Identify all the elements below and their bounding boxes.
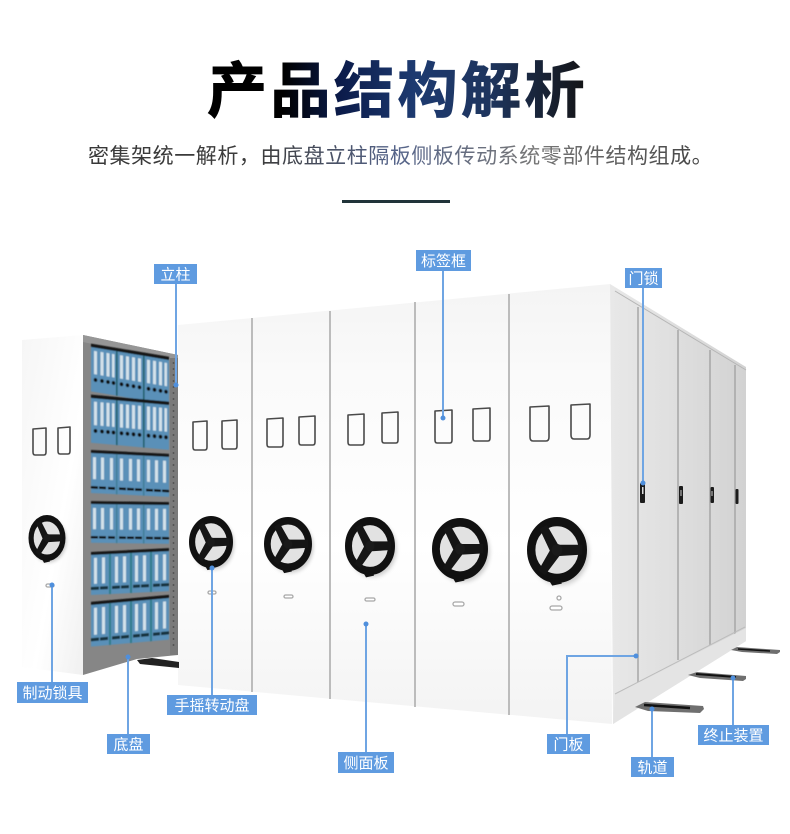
callout: 底盘: 底盘 xyxy=(113,736,144,754)
callout: 底盘 xyxy=(107,654,150,754)
title: 产品结构解析 xyxy=(207,58,588,125)
callout: 制动锁具 xyxy=(17,582,88,703)
brake locks xyxy=(46,584,562,610)
rails xyxy=(635,647,780,713)
main cabinet: side panels xyxy=(610,284,746,724)
open cabinet xyxy=(22,335,179,675)
callout: 门板: 门板 xyxy=(553,736,584,754)
callout: 门锁: 门锁 xyxy=(628,270,659,288)
white end panel xyxy=(22,335,83,675)
callout: 轨道: 轨道 xyxy=(637,760,668,776)
callout: 终止装置: 终止装置 xyxy=(703,728,764,744)
callout: 手摇转动盘: 手摇转动盘 xyxy=(174,696,250,714)
callout: 手摇转动盘 xyxy=(167,566,257,715)
callout: 侧面板 xyxy=(338,622,394,773)
callout: 终止装置 xyxy=(698,676,769,745)
main cabinet: front panels xyxy=(178,284,612,724)
handwheels xyxy=(31,518,589,586)
left rail xyxy=(137,658,179,668)
callout: 标签框 xyxy=(416,250,471,420)
door locks xyxy=(640,483,738,504)
divider xyxy=(342,200,450,203)
callout: 侧面板: 侧面板 xyxy=(343,754,389,772)
callout: 制动锁具: 制动锁具 xyxy=(22,685,83,702)
callout: 立柱 xyxy=(154,264,197,388)
callout: 标签框: 标签框 xyxy=(421,253,466,270)
subtitle: 密集架统一解析，由底盘立柱隔板侧板传动系统零部件结构组成。 xyxy=(88,145,713,168)
callout: 立柱: 立柱 xyxy=(160,266,191,284)
label frames xyxy=(33,404,590,455)
callout: 门板 xyxy=(547,654,638,754)
binders xyxy=(91,344,169,647)
callout: 门锁 xyxy=(625,268,662,486)
grey steel frame xyxy=(83,335,178,675)
callout: 轨道 xyxy=(631,706,674,777)
